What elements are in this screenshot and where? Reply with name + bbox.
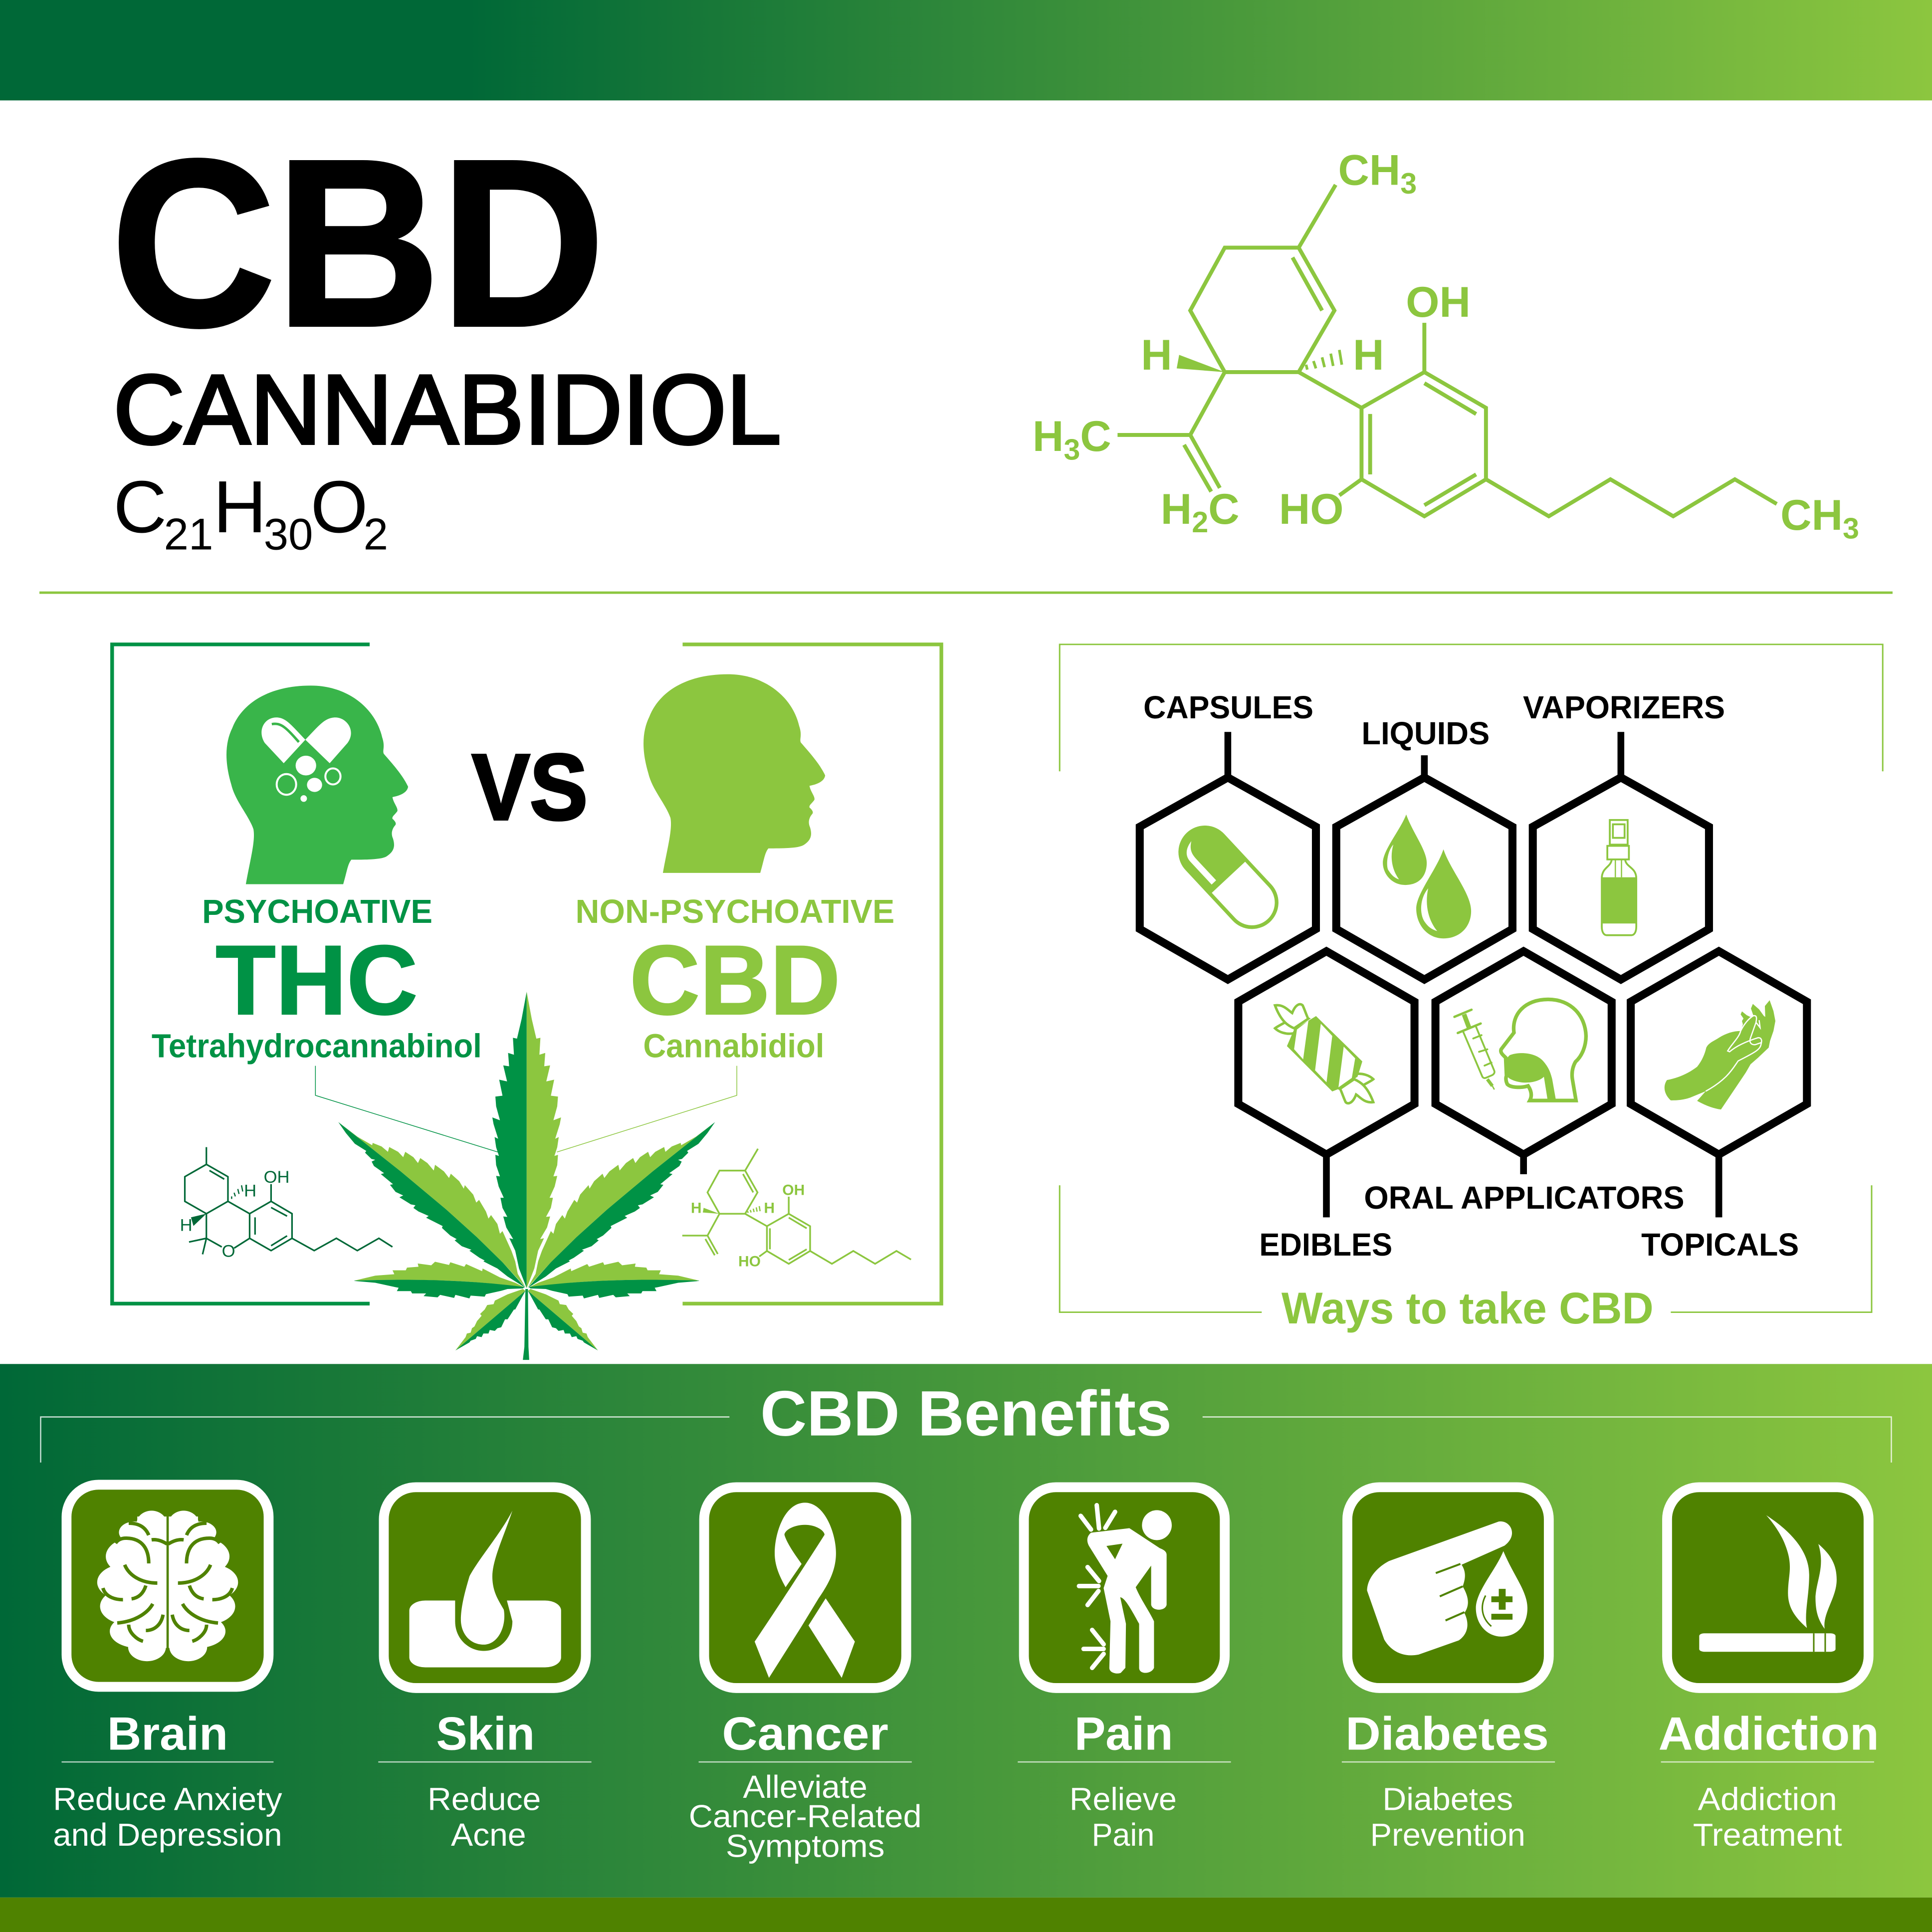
- label: liquids: LIQUIDS: [1361, 715, 1490, 751]
- description: Cancer: [689, 1769, 922, 1864]
- benefit: Addiction: [1659, 1487, 1879, 1853]
- heading: CBD Benefits: CBD Benefits: [760, 1378, 1172, 1450]
- molecule: CBD small: H: [764, 1200, 775, 1216]
- top gradient bar: [0, 0, 1932, 100]
- chemical formula: O: [310, 466, 368, 548]
- name: Pain: Pain: [1074, 1707, 1173, 1759]
- label: CH3 tail: 3: [1843, 511, 1859, 545]
- panel: Ways to take CBD: [1060, 644, 1883, 1333]
- icon: capsule: [1170, 817, 1287, 937]
- label: CH3 top: 3: [1400, 167, 1417, 200]
- label: NON-PSYCHOATIVE: NON-PSYCHOATIVE: [576, 893, 894, 930]
- chemical formula: 30: [264, 510, 313, 559]
- panel: CBD Benefits background: [0, 1364, 1932, 1898]
- label: H3C: C: [1080, 413, 1111, 460]
- molecule: THC: O: [222, 1242, 235, 1261]
- description: Brain: [53, 1781, 282, 1853]
- icon tile: pain figure: [1024, 1487, 1225, 1688]
- text: THC column: [152, 893, 482, 1065]
- connector: THC to leaf: [315, 1066, 498, 1152]
- description: Addiction: Addiction: [1698, 1781, 1837, 1817]
- bracket: THC: [112, 644, 370, 1303]
- label: CBD: CBD: [630, 925, 841, 1035]
- molecule: THC: H: [180, 1216, 193, 1235]
- icon: CBD head: [644, 674, 825, 873]
- label: Tetrahydrocannabinol: Tetrahydrocannabinol: [152, 1028, 482, 1065]
- label: CH3 tail: CH: [1780, 491, 1843, 539]
- description: Skin: Reduce: [428, 1781, 541, 1817]
- title block: [111, 110, 781, 559]
- description: Brain: and Depression: [53, 1817, 282, 1853]
- label: H2C: 2: [1192, 505, 1208, 539]
- panel: THC vs CBD: [112, 644, 941, 1360]
- icon: cannabis leaf: [338, 992, 715, 1360]
- label: edibles: EDIBLES: [1259, 1227, 1392, 1263]
- benefit: Cancer: [689, 1487, 922, 1864]
- icon tile: skin: [384, 1487, 586, 1688]
- label: H3C: 3: [1064, 432, 1080, 466]
- chemical formula: C: [113, 466, 167, 548]
- name: Addiction: Addiction: [1659, 1707, 1879, 1759]
- description: Skin: [428, 1781, 541, 1853]
- label: capsules: CAPSULES: [1143, 689, 1313, 725]
- hexagon labels: [1143, 689, 1799, 1263]
- icon: spray bottle: [1601, 820, 1637, 935]
- chemical formula: 21: [164, 510, 213, 559]
- molecule: CBD small: [682, 1149, 911, 1270]
- description: Diabetes: Prevention: [1370, 1817, 1525, 1853]
- heading: Ways to take CBD: Ways to take CBD: [1282, 1284, 1654, 1333]
- label: H2C: H: [1161, 485, 1192, 533]
- molecule: THC: OH: [264, 1168, 289, 1187]
- molecule: THC: H: [244, 1181, 256, 1200]
- benefit: Pain: [1018, 1487, 1231, 1853]
- description: Diabetes: [1370, 1781, 1525, 1853]
- icon: candy: [1275, 1004, 1373, 1103]
- bracket: CBD: [682, 644, 941, 1303]
- label: HO: HO: [1279, 485, 1344, 533]
- label: OH: OH: [1406, 278, 1471, 326]
- description: Addiction: Treatment: [1693, 1817, 1842, 1853]
- label: vaporizers: VAPORIZERS: [1523, 689, 1725, 725]
- hexagon grid: [1140, 732, 1807, 1217]
- icon tile: cigarette: [1667, 1487, 1869, 1688]
- molecule: CBD small: OH: [782, 1182, 805, 1198]
- icon: THC head with pills: [226, 685, 408, 884]
- name: Brain: Brain: [107, 1707, 228, 1759]
- description: Pain: Pain: [1091, 1817, 1154, 1853]
- CBD molecule diagram: [1033, 147, 1859, 545]
- label: H right: H: [1353, 331, 1384, 379]
- label: H2C: C: [1208, 485, 1240, 533]
- text: CBD column: [576, 893, 894, 1065]
- label: Cannabidiol: Cannabidiol: [643, 1028, 824, 1065]
- icon tile: brain: [66, 1485, 268, 1687]
- frame top: [1060, 644, 1883, 771]
- description: Cancer: Cancer-Related: [689, 1798, 922, 1834]
- bottom strip: [0, 1898, 1932, 1932]
- icon tile: ribbon: [704, 1487, 906, 1688]
- benefit: Diabetes: [1342, 1487, 1555, 1853]
- description: Skin: Acne: [451, 1817, 526, 1853]
- icon tile: finger and drop: [1347, 1487, 1549, 1688]
- label: topicals: TOPICALS: [1641, 1227, 1799, 1263]
- frame bottom: [1060, 1185, 1872, 1312]
- label: H3C: H: [1033, 413, 1064, 460]
- name: Skin: Skin: [436, 1707, 535, 1759]
- label: THC: THC: [215, 925, 418, 1035]
- benefit: Skin: [378, 1487, 592, 1853]
- description: Brain: Reduce Anxiety: [53, 1781, 282, 1817]
- description: Cancer: Alleviate: [743, 1769, 867, 1805]
- description: Pain: Relieve: [1070, 1781, 1177, 1817]
- label: PSYCHOATIVE: PSYCHOATIVE: [202, 893, 432, 930]
- title: CBD: CBD: [111, 110, 605, 376]
- heading: VS: VS: [472, 735, 588, 840]
- chemical formula: 2: [364, 510, 388, 559]
- benefit: Brain: [53, 1485, 282, 1853]
- description: Cancer: Symptoms: [726, 1828, 884, 1864]
- molecule: CBD small: H: [691, 1200, 702, 1216]
- connector: CBD to leaf: [557, 1066, 737, 1152]
- label: H left: H: [1141, 331, 1172, 379]
- icon: oral applicator head and syringe: [1455, 999, 1586, 1101]
- description: Pain: [1070, 1781, 1177, 1853]
- description: Diabetes: Diabetes: [1382, 1781, 1513, 1817]
- subtitle: CANNABIDIOL: CANNABIDIOL: [113, 354, 781, 464]
- icon: liquid drops: [1383, 815, 1471, 938]
- label: oral applicators: ORAL APPLICATORS: [1364, 1180, 1685, 1216]
- name: Cancer: Cancer: [722, 1707, 888, 1759]
- frame: benefits: [41, 1417, 1891, 1463]
- molecule: CBD small: HO: [738, 1254, 761, 1270]
- description: Addiction: [1693, 1781, 1842, 1853]
- chemical formula: H: [213, 466, 266, 548]
- name: Diabetes: Diabetes: [1345, 1707, 1549, 1759]
- molecule: THC: [180, 1147, 393, 1261]
- label: CH3 top: CH: [1338, 147, 1400, 195]
- icon: hands topical: [1665, 1000, 1775, 1109]
